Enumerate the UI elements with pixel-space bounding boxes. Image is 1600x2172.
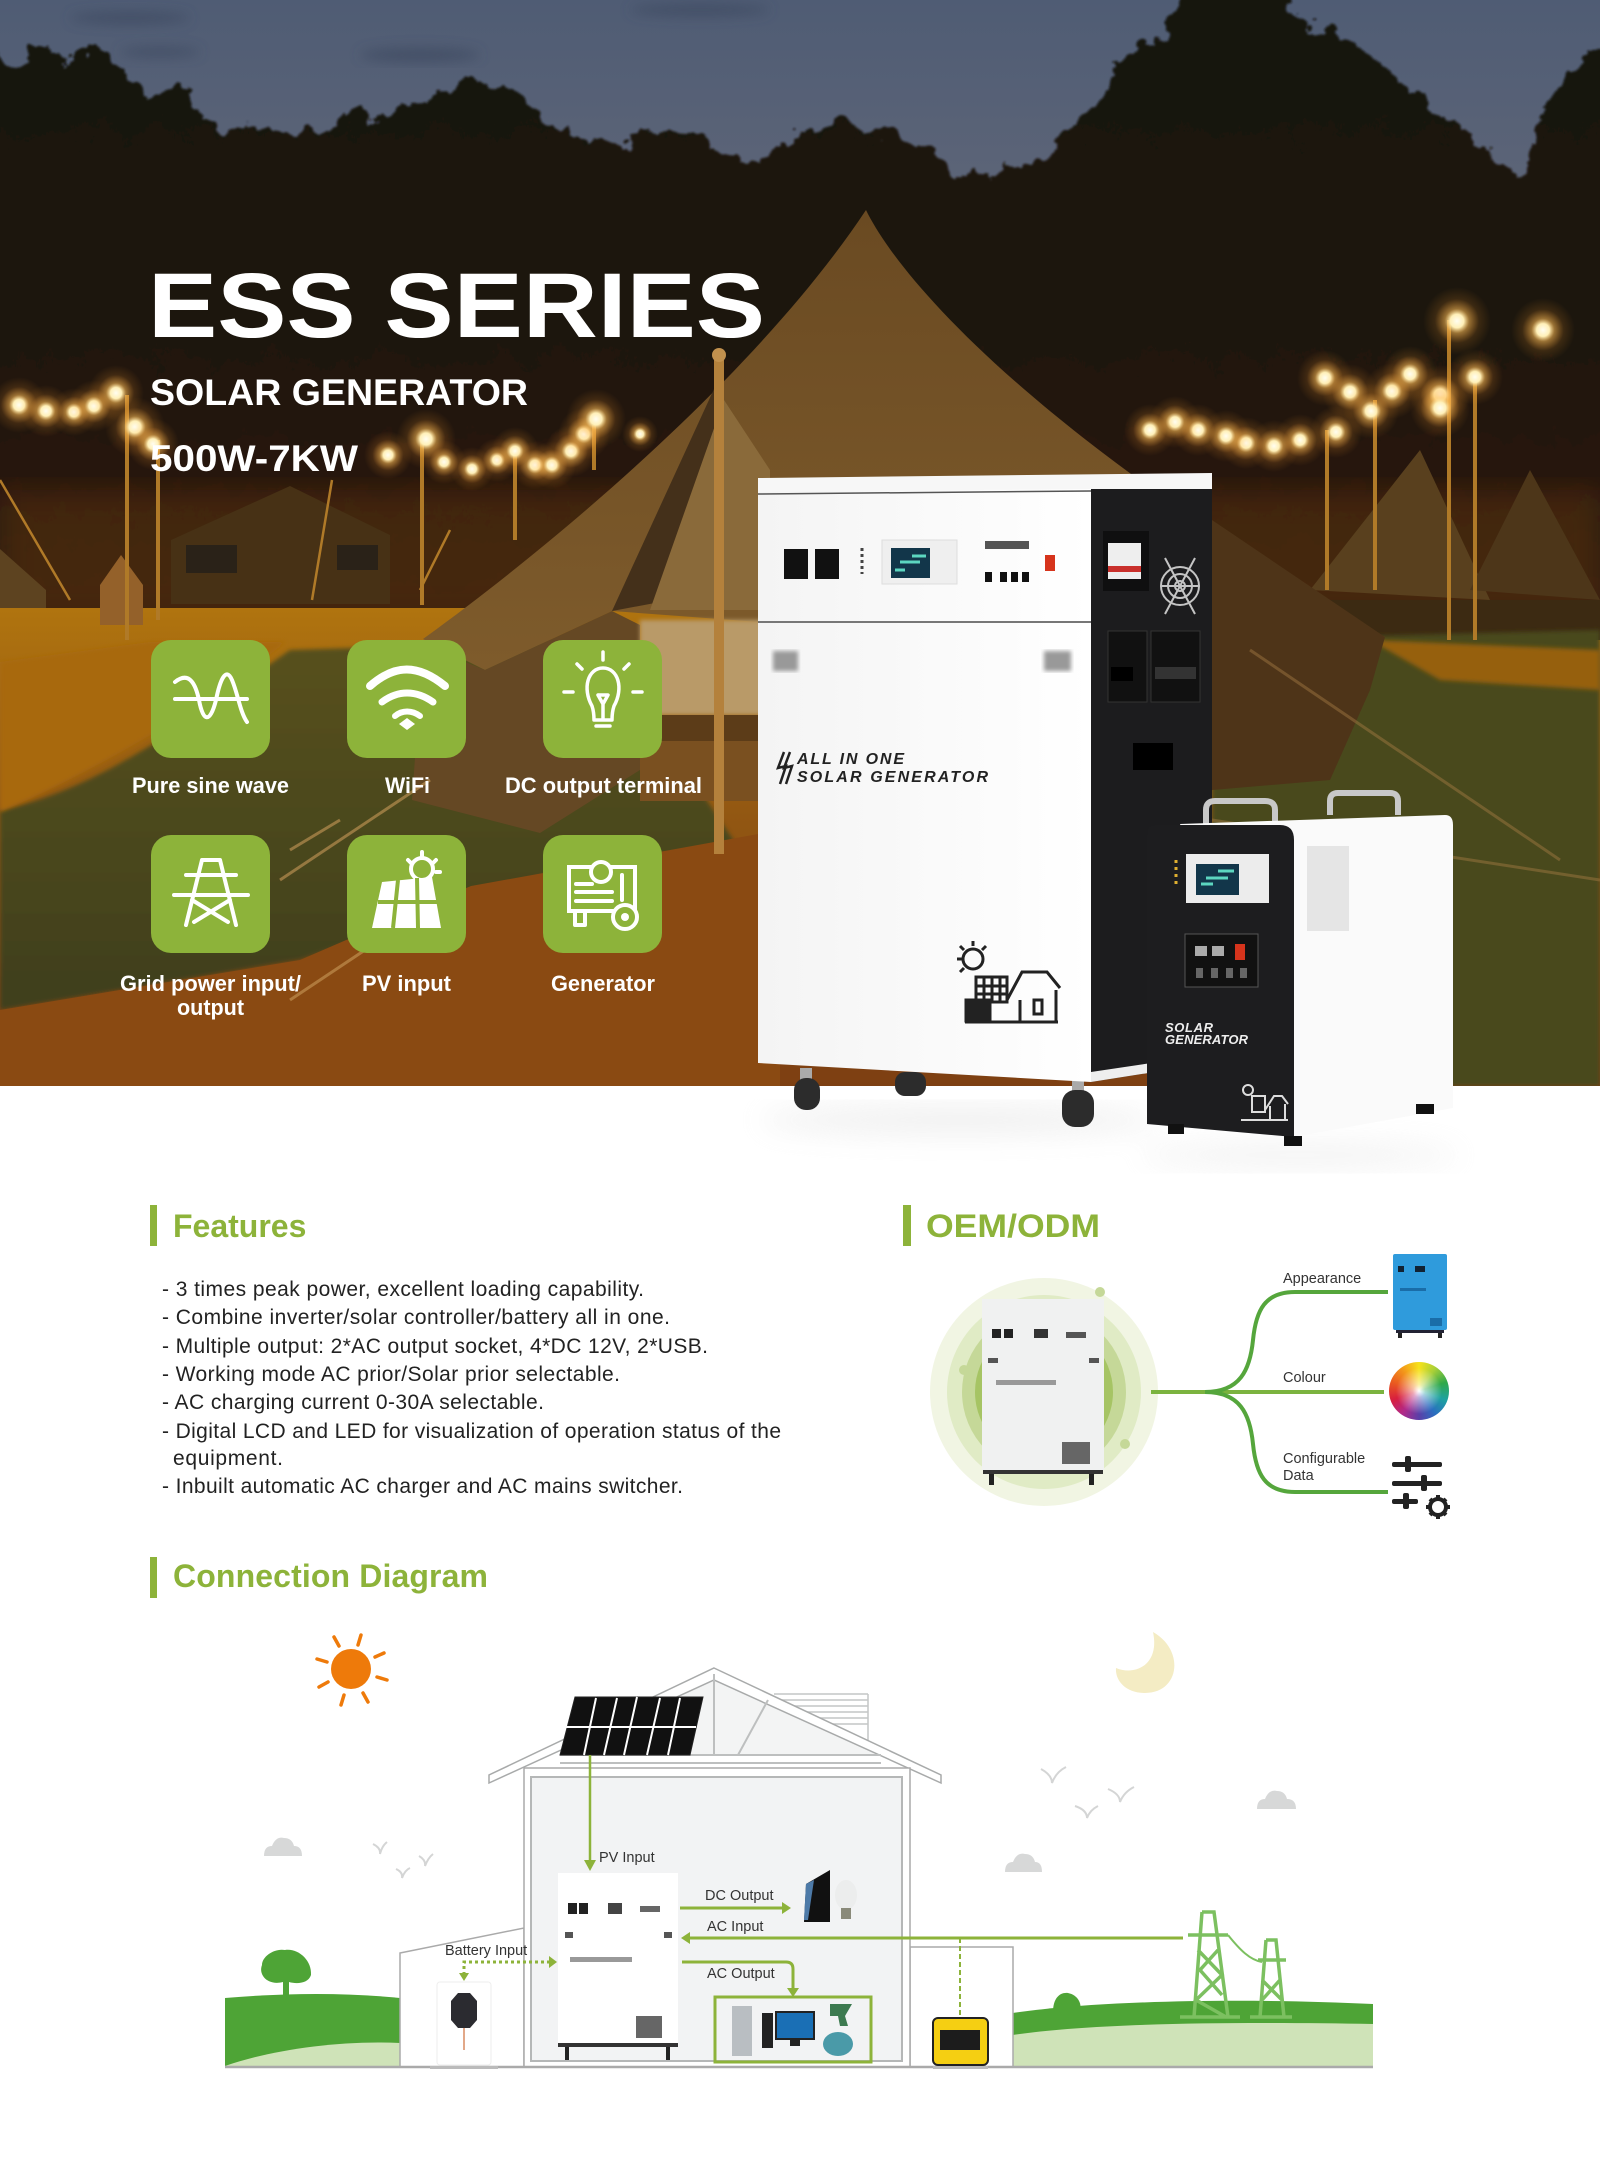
big tent bed bbox=[640, 620, 765, 801]
handles bbox=[1206, 793, 1398, 825]
walls bbox=[524, 1768, 910, 2067]
base band bbox=[1091, 1054, 1212, 1082]
tree line silhouette bbox=[0, 0, 1600, 608]
icon: pure sine wave bbox=[132, 640, 289, 798]
big tent roof bbox=[423, 210, 1385, 690]
arrow: ac input: AC Input bbox=[707, 1919, 763, 1935]
arrow: ac output: AC Output bbox=[707, 1966, 775, 1982]
white body bbox=[1180, 815, 1453, 1137]
configurable sliders and gear bbox=[1392, 1456, 1450, 1519]
brand text: ALL IN ONE bbox=[796, 751, 905, 768]
text block: feature list: - Working mode AC prior/Solar prior selectable. bbox=[162, 1363, 620, 1386]
icon: grid power tower bbox=[120, 835, 301, 1020]
handle recesses bbox=[773, 651, 798, 671]
left cabin tent bbox=[171, 486, 390, 604]
icon: colour wheel bbox=[1389, 1362, 1449, 1420]
lcd panel bbox=[1176, 854, 1269, 903]
big tent dark flap bbox=[612, 389, 724, 611]
far right tents bbox=[1312, 450, 1600, 640]
left hill bbox=[225, 1994, 400, 2066]
arrow: dc output: DC Output bbox=[705, 1888, 774, 1904]
poles bbox=[0, 395, 594, 640]
halo rings bbox=[930, 1278, 1158, 1506]
icon: pure sine wave: Pure sine wave bbox=[132, 773, 289, 798]
arrow: battery input bbox=[445, 1943, 557, 1981]
front face bbox=[758, 489, 1091, 1082]
title line: ESS SERIES: ESS SERIES bbox=[148, 255, 765, 357]
big tent wall left bbox=[412, 611, 640, 833]
sun bbox=[317, 1635, 387, 1705]
brand text: SOLAR GENERATOR bbox=[797, 769, 988, 786]
title bbox=[148, 255, 765, 479]
sky clouds bbox=[70, 4, 770, 62]
output panel bbox=[1185, 934, 1258, 987]
diagram: oem customisation bbox=[930, 1254, 1450, 1519]
branch labels: Data bbox=[1283, 1468, 1315, 1484]
text block: feature list: - 3 times peak power, excellent loading capability. bbox=[162, 1278, 644, 1301]
cabinet top bbox=[758, 473, 1212, 496]
icon: generator: Generator bbox=[551, 971, 655, 996]
birds bbox=[373, 1767, 1134, 1878]
branch labels: Appearance bbox=[1283, 1271, 1361, 1287]
right grass bbox=[1212, 630, 1600, 1086]
brand text bbox=[778, 751, 988, 786]
right orange strip bbox=[1370, 640, 1600, 690]
arrow: generator dashed bbox=[959, 1938, 961, 2022]
casters bbox=[794, 1068, 1094, 1127]
mini unit bbox=[982, 1299, 1104, 1485]
blue unit bbox=[1393, 1254, 1447, 1338]
left small tent bbox=[0, 549, 46, 608]
tree bbox=[261, 1950, 311, 1998]
diagram: home connection bbox=[225, 1632, 1373, 2069]
warm horizon glow bbox=[0, 490, 1600, 620]
power range: 500W-7KW bbox=[150, 438, 358, 479]
feet bbox=[1168, 1124, 1184, 1134]
moon bbox=[1116, 1632, 1174, 1693]
wooden cabin bbox=[100, 555, 143, 625]
text block: feature list: - Multiple output: 2*AC output socket, 4*DC 12V, 2*USB. bbox=[162, 1335, 708, 1358]
appliances box bbox=[715, 1997, 871, 2062]
clouds bbox=[264, 1791, 1296, 1872]
gable infill bbox=[560, 1680, 881, 1755]
seam bbox=[758, 621, 1091, 623]
dc loads: phone and bulb bbox=[804, 1870, 857, 1922]
right poles bbox=[1327, 320, 1475, 640]
heading: features: Features bbox=[173, 1208, 306, 1244]
soil foreground bbox=[0, 830, 780, 1090]
breaker panel bbox=[1103, 531, 1149, 591]
subtitle: solar generator: SOLAR GENERATOR bbox=[150, 372, 528, 413]
control panel bbox=[784, 540, 1055, 584]
tent guy ropes bbox=[280, 780, 440, 1000]
main wooden pole bbox=[714, 354, 724, 854]
generator bbox=[933, 2018, 988, 2069]
side face bbox=[1091, 489, 1212, 1082]
icon: pv panel with sun bbox=[347, 835, 466, 996]
arrow: pv input: PV Input bbox=[599, 1850, 655, 1866]
side port plates bbox=[1108, 631, 1200, 770]
cooling fan bbox=[1161, 558, 1199, 614]
heading: oem odm: OEM/ODM bbox=[926, 1208, 1100, 1244]
solar panel bbox=[560, 1697, 703, 1755]
icon: generator bbox=[543, 835, 662, 996]
arrow: pv input bbox=[584, 1755, 655, 1871]
branch labels bbox=[1283, 1271, 1365, 1484]
text block: feature list bbox=[162, 1278, 781, 1498]
solar house pictogram bbox=[957, 941, 1060, 1022]
sky bbox=[0, 0, 1600, 181]
arrow: ac output bbox=[682, 1962, 799, 1997]
text block: feature list: - Combine inverter/solar controller/battery all in one. bbox=[162, 1306, 670, 1329]
small unit brand text: SOLAR bbox=[1165, 1020, 1214, 1035]
text block: feature list: - AC charging current 0-30A selectable. bbox=[162, 1391, 544, 1414]
branch labels: Colour bbox=[1283, 1370, 1326, 1386]
arrow: ac input bbox=[681, 1919, 1183, 1944]
arrow: battery input: Battery Input bbox=[445, 1943, 527, 1959]
branch labels: Configurable bbox=[1283, 1451, 1365, 1467]
black front bbox=[1147, 825, 1294, 1137]
small unit brand text: GENERATOR bbox=[1165, 1032, 1249, 1047]
icon: wifi: WiFi bbox=[385, 773, 430, 798]
roof bbox=[489, 1668, 941, 1783]
icon: grid power tower: output bbox=[177, 995, 245, 1020]
annexes bbox=[400, 1928, 524, 2067]
string lights bbox=[0, 287, 1575, 491]
wall battery bbox=[430, 1982, 498, 2069]
arrow: dc output bbox=[680, 1888, 791, 1914]
ground line bbox=[225, 2066, 1373, 2068]
panel: hero night camp photo bbox=[0, 0, 1600, 1090]
ground bbox=[0, 608, 1600, 1088]
big tent right side bbox=[1212, 520, 1385, 790]
icon: pv panel with sun: PV input bbox=[362, 971, 452, 996]
big tent interior bbox=[650, 400, 770, 610]
transmission towers bbox=[1180, 1912, 1292, 2017]
icon: wifi bbox=[347, 640, 466, 798]
text block: feature list: - Inbuilt automatic AC charger and AC mains switcher. bbox=[162, 1475, 683, 1498]
unit in house bbox=[558, 1873, 678, 2060]
small solar house pictogram bbox=[1241, 1085, 1288, 1120]
vent grille bbox=[1307, 846, 1349, 931]
text block: feature list: - Digital LCD and LED for visualization of operation status of the bbox=[162, 1420, 781, 1443]
heading: oem odm bbox=[903, 1205, 1100, 1246]
icon grid: capabilities bbox=[120, 640, 702, 1020]
grass band bbox=[0, 640, 760, 1010]
product: small portable unit bbox=[1147, 793, 1453, 1146]
small unit brand text bbox=[1165, 1020, 1249, 1047]
orange path left bbox=[0, 720, 151, 814]
icon: dc output bulb bbox=[505, 640, 702, 798]
product: large all-in-one unit bbox=[758, 473, 1212, 1127]
heading: connection diagram: Connection Diagram bbox=[173, 1558, 488, 1594]
rear gable bbox=[774, 1694, 868, 1755]
text block: feature list: equipment. bbox=[173, 1447, 283, 1470]
icon: dc output bulb: DC output terminal bbox=[505, 773, 702, 798]
icon: grid power tower: Grid power input/ bbox=[120, 971, 301, 996]
right hill bbox=[1013, 1993, 1373, 2067]
branching lines bbox=[1151, 1292, 1388, 1492]
product shadow under units bbox=[760, 1106, 1460, 1167]
house bbox=[400, 1668, 1013, 2067]
